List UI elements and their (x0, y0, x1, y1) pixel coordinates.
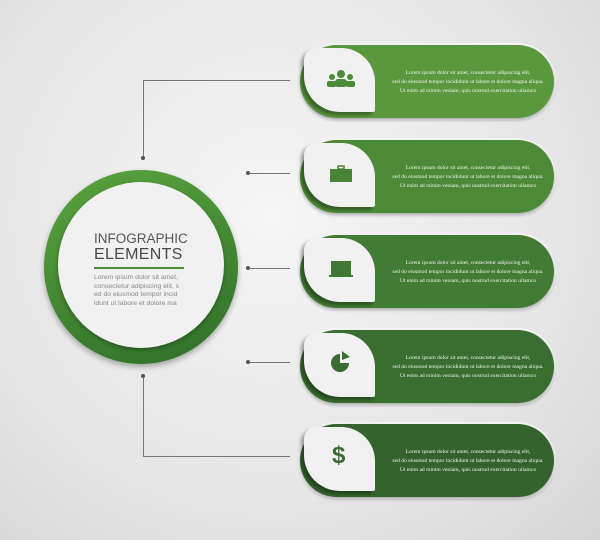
title: ELEMENTS (94, 246, 183, 263)
connector lines (44, 80, 554, 457)
main circle (44, 170, 238, 364)
card 4: Lorem ipsum dolor sit amet, consectetur adipiscing elit, (406, 355, 530, 361)
card 2 (300, 140, 554, 213)
card 2: Ut enim ad minim veniam, quis nostrud exercitation ullamco (400, 183, 536, 189)
card 4: sed do eiusmod tempor incididunt ut labore et dolore magna aliqua. (392, 364, 544, 370)
card 5: sed do eiusmod tempor incididunt ut labore et dolore magna aliqua. (392, 458, 544, 464)
card 1: sed do eiusmod tempor incididunt ut labore et dolore magna aliqua. (392, 79, 544, 85)
card 5 (300, 424, 554, 497)
card 2: Lorem ipsum dolor sit amet, consectetur adipiscing elit, (406, 165, 530, 171)
card 4 (300, 330, 554, 403)
circle text (94, 274, 179, 306)
card 3: Lorem ipsum dolor sit amet, consectetur adipiscing elit, (406, 260, 530, 266)
card 3: sed do eiusmod tempor incididunt ut labore et dolore magna aliqua. (392, 269, 544, 275)
icon: briefcase (304, 143, 375, 207)
card 1 (300, 45, 554, 118)
card 2: sed do eiusmod tempor incididunt ut labore et dolore magna aliqua. (392, 174, 544, 180)
card 4: Ut enim ad minim veniam, quis nostrud exercitation ullamco (400, 373, 536, 379)
card 3 (300, 235, 554, 308)
icon: dollar (304, 427, 375, 491)
card 5: Lorem ipsum dolor sit amet, consectetur adipiscing elit, (406, 449, 530, 455)
circle text: idunt ut labore et dolore ma (94, 300, 177, 306)
icon: pie chart (304, 333, 375, 397)
circle text: consectetur adipiscing elit, s (94, 282, 179, 290)
circle text: ed do eiusmod tempor incid (94, 291, 178, 298)
card 5: Ut enim ad minim veniam, quis nostrud exercitation ullamco (400, 467, 536, 473)
icon: dollar: $ (332, 442, 345, 469)
title: INFOGRAPHIC (94, 231, 188, 246)
card 1: Lorem ipsum dolor sit amet, consectetur adipiscing elit, (406, 70, 530, 76)
circle text: Lorem ipsum dolor sit amet, (94, 274, 178, 281)
title (94, 231, 188, 269)
card 3: Ut enim ad minim veniam, quis nostrud exercitation ullamco (400, 278, 536, 284)
icon: screen (304, 238, 375, 302)
card 1: Ut enim ad minim veniam, quis nostrud exercitation ullamco (400, 88, 536, 94)
icon: people (304, 48, 375, 112)
